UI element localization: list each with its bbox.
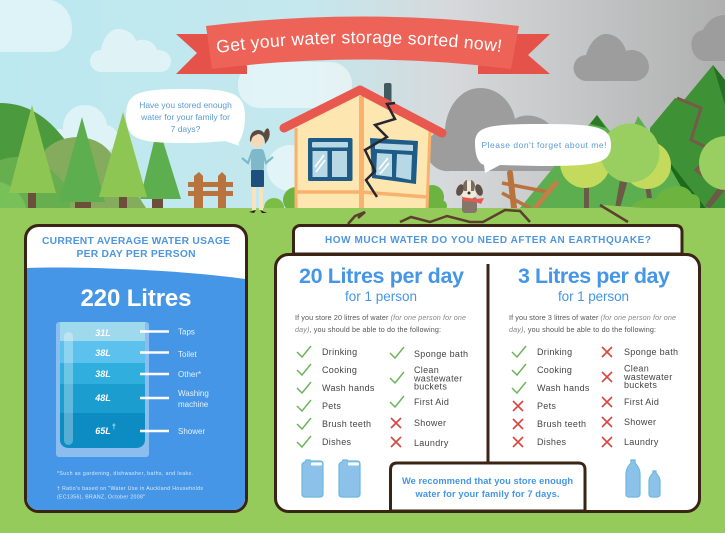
mountains right: [520, 65, 725, 215]
20 litres list: left: Drinking: [322, 347, 357, 357]
20 litres list: left: Brush teeth: [322, 419, 371, 429]
3 litres list: right: First Aid: [624, 397, 659, 407]
wall crack: [365, 103, 395, 197]
chart labels: Taps: [178, 328, 195, 336]
footnotes: (EC1356), BRANZ, October 2008": [57, 494, 145, 500]
3 litres intro: [509, 313, 676, 334]
3 litres list: right: Shower: [624, 417, 656, 427]
panel: water needs: [276, 254, 700, 512]
20 litres intro: If you store 20 litres of water (for one person for one: [295, 313, 466, 322]
3 litres list: left: Pets: [537, 401, 556, 411]
20 litres list: right: Sponge bath: [414, 349, 468, 359]
banner tails: [176, 34, 247, 74]
chart labels: Washing: [178, 389, 209, 398]
dog: [455, 180, 484, 213]
ground cracks: [348, 205, 628, 224]
speech bubble: girl: 7 days?: [171, 124, 201, 134]
3 litres list: left: [512, 346, 590, 447]
3 litres list: right: Clean: [624, 364, 649, 374]
title text: Get your water storage sorted now!: [217, 32, 502, 52]
round trees: [560, 124, 725, 210]
footnotes: [57, 471, 203, 500]
usage heading: PER DAY PER PERSON: [76, 249, 196, 260]
roof: [284, 90, 442, 133]
chart labels: machine: [178, 400, 209, 409]
glass chart: †: [112, 424, 116, 431]
title banner: [176, 16, 550, 74]
total litres: 220 Litres: [80, 285, 192, 312]
speech bubble: girl: water for your family for: [140, 112, 230, 122]
column: 20 litres: [295, 264, 468, 497]
20 litres list: left: Wash hands: [322, 383, 375, 393]
3 litres intro: day), you should be able to do the following:: [509, 325, 656, 334]
sky background: [0, 0, 725, 215]
chart leader lines: [140, 332, 169, 431]
broken fence: [502, 173, 556, 208]
column divider: [486, 264, 490, 463]
panel: how much water header: [294, 226, 682, 254]
ground: [0, 205, 725, 533]
3 litres list: right: wastewater: [623, 372, 673, 382]
left fence: [188, 172, 233, 208]
clouds: storm: [426, 15, 725, 171]
20 litres list: right: buckets: [414, 382, 447, 392]
bushes near house: [264, 185, 447, 218]
speech bubble: girl: Have you stored enough: [139, 100, 232, 110]
mountain crack: [677, 98, 710, 181]
chart labels: [178, 328, 209, 436]
20 litres list: left: Cooking: [322, 365, 357, 375]
left window: [308, 138, 352, 181]
3 litres subheading: for 1 person: [558, 289, 629, 304]
column: 3 litres: [509, 264, 678, 497]
usage heading: CURRENT AVERAGE WATER USAGE: [42, 236, 230, 247]
3 litres list: right: [602, 347, 678, 447]
left trees: [9, 105, 181, 208]
glass chart: 38L: [95, 348, 111, 358]
chart labels: Toilet: [178, 350, 197, 359]
recommendation box: We recommend that you store enough: [402, 476, 573, 486]
chart labels: Other*: [178, 370, 201, 379]
hills left: [0, 103, 146, 210]
recommendation box: water for your family for 7 days.: [414, 489, 560, 499]
3 litres list: right: buckets: [624, 380, 657, 390]
panel: current water usage: [26, 226, 246, 512]
usage heading: [42, 236, 230, 260]
3 litres list: left: Drinking: [537, 347, 572, 357]
speech bubble: dog: Please don't forget about me!: [482, 140, 606, 150]
20 litres list: left: Dishes: [322, 437, 352, 447]
speech bubble: dog: [475, 124, 611, 173]
3 litres heading: 3 Litres per day: [518, 264, 670, 288]
3 litres list: right: Laundry: [624, 437, 659, 447]
20 litres list: right: Clean: [414, 365, 439, 375]
icon: jerry cans: [302, 460, 360, 497]
speech bubble: girl: [126, 89, 245, 146]
footnotes: † Ratio's based on "Water Use in Auckland Households: [57, 486, 203, 492]
blue wave background: [27, 267, 245, 510]
3 litres list: right: Sponge bath: [624, 347, 678, 357]
girl: [242, 128, 273, 213]
20 litres list: left: Pets: [322, 401, 341, 411]
20 litres subheading: for 1 person: [345, 289, 417, 304]
3 litres list: left: Dishes: [537, 437, 567, 447]
glass chart: 31L: [95, 328, 111, 338]
glass chart: 38L: [95, 369, 111, 379]
chimney: [384, 83, 392, 105]
20 litres list: right: Shower: [414, 418, 446, 428]
panel: how much water header: HOW MUCH WATER DO YOU NEED AFTER AN EARTHQUAKE?: [325, 235, 651, 246]
20 litres list: left: [297, 346, 375, 447]
20 litres heading: 20 Litres per day: [299, 264, 464, 288]
clouds: light: [0, 0, 352, 191]
chart labels: Shower: [178, 427, 205, 436]
footnotes: *Such as gardening, dishwasher, baths, and leaks.: [57, 471, 193, 477]
house: [284, 83, 442, 208]
3 litres list: left: Cooking: [537, 365, 572, 375]
right window: [370, 138, 418, 184]
icon: water bottles: [626, 460, 660, 497]
3 litres list: left: Wash hands: [537, 383, 590, 393]
3 litres intro: If you store 3 litres of water (for one person for one: [509, 313, 676, 322]
glass chart: 48L: [94, 393, 111, 403]
20 litres list: right: First Aid: [414, 397, 449, 407]
recommendation box: [390, 463, 585, 511]
20 litres list: right: [390, 347, 468, 448]
3 litres list: left: Brush teeth: [537, 419, 586, 429]
20 litres list: right: Laundry: [414, 438, 449, 448]
glass chart: 65L: [95, 426, 111, 436]
20 litres intro: [295, 313, 466, 334]
glass chart: [56, 322, 149, 457]
20 litres list: right: wastewater: [413, 374, 463, 384]
20 litres intro: day), you should be able to do the following:: [295, 325, 441, 334]
